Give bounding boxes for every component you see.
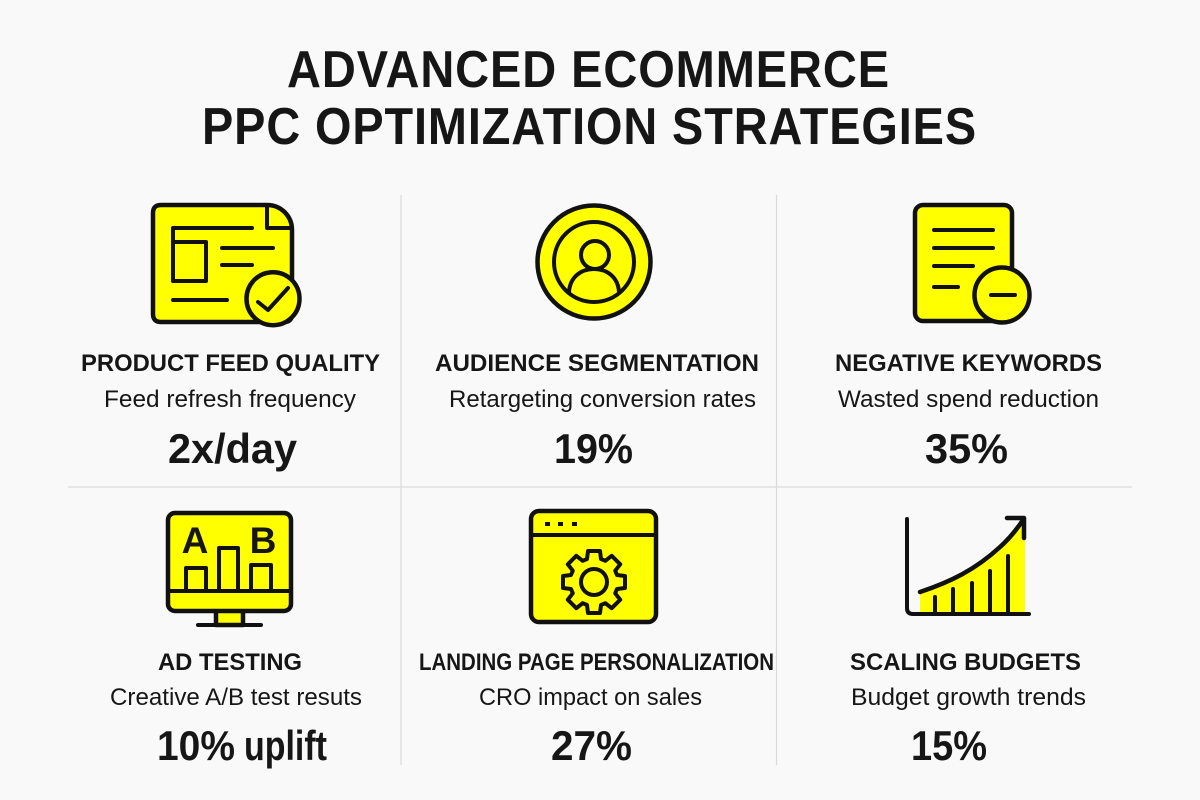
title <box>202 41 977 156</box>
heading: NEGATIVE KEYWORDS <box>835 350 1102 377</box>
icon: product feed document with check <box>153 205 300 325</box>
icon: A/B test monitor <box>168 513 291 625</box>
icon: document with minus <box>915 205 1030 322</box>
value: 27% <box>551 722 632 769</box>
panel: scaling budgets <box>850 518 1086 769</box>
heading: LANDING PAGE PERSONALIZATION <box>419 649 774 676</box>
panel: landing page personalization <box>419 511 774 769</box>
description: Feed refresh frequency <box>104 386 356 413</box>
description: Retargeting conversion rates <box>449 386 756 413</box>
description: Wasted spend reduction <box>838 386 1099 413</box>
description: CRO impact on sales <box>479 684 702 711</box>
heading: SCALING BUDGETS <box>850 649 1081 676</box>
value: 10% <box>157 722 235 769</box>
icon: growth chart with arrow <box>907 518 1029 614</box>
value: 35% <box>925 425 1008 472</box>
description: Budget growth trends <box>851 684 1086 711</box>
title: ADVANCED ECOMMERCE <box>287 41 890 99</box>
icon: A/B test monitor: A <box>182 520 208 561</box>
heading: AUDIENCE SEGMENTATION <box>435 350 759 377</box>
heading: AD TESTING <box>158 649 302 676</box>
value: 2x/day <box>168 425 298 472</box>
icon: browser window with gear <box>531 511 656 622</box>
description: Creative A/B test resuts <box>110 684 362 711</box>
panel: audience segmentation <box>435 206 759 472</box>
panel: ad testing <box>110 513 362 769</box>
heading: PRODUCT FEED QUALITY <box>81 350 380 377</box>
icon: A/B test monitor: B <box>250 520 276 561</box>
panel: product feed quality <box>81 205 380 472</box>
value: uplift <box>244 722 327 769</box>
value: 15% <box>911 722 987 769</box>
title: PPC OPTIMIZATION STRATEGIES <box>202 98 977 156</box>
icon: user in circle <box>538 206 650 318</box>
panel: negative keywords <box>835 205 1102 472</box>
value: 19% <box>554 425 633 472</box>
